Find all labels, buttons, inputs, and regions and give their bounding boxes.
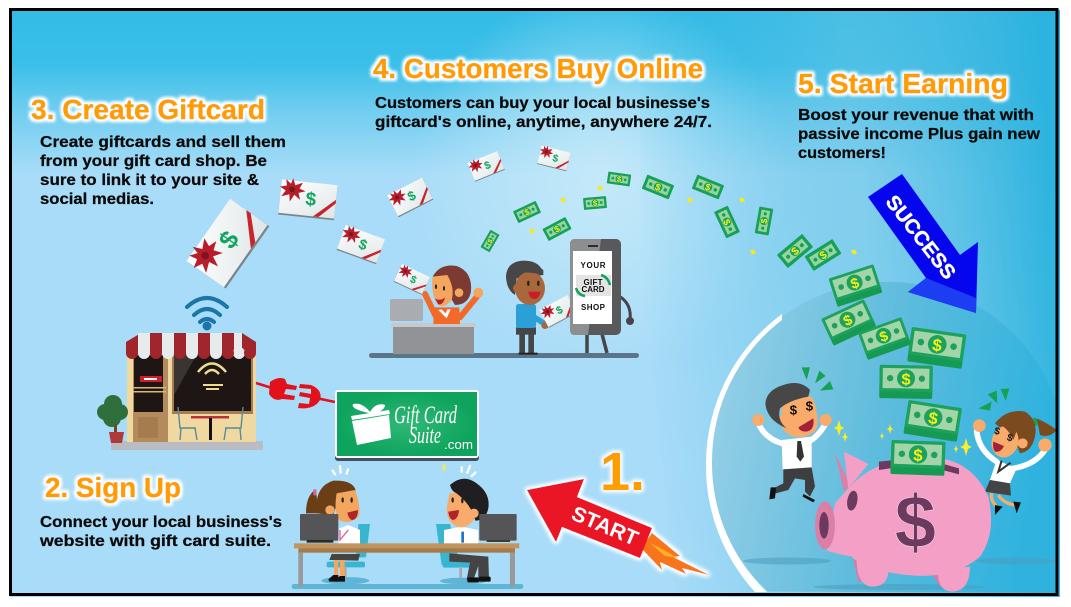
smartphone shop character: SHOP: [581, 303, 606, 312]
piggy bank: [815, 452, 991, 592]
smartphone shop character: CARD: [582, 285, 605, 294]
text: sign up description: [39, 514, 282, 550]
start arrow: START: [568, 502, 642, 551]
text: create giftcard description: from your gift card shop. Be: [40, 153, 267, 170]
text: customers buy description: Customers can buy your local businesse's: [375, 95, 710, 112]
text: create giftcard description: sure to link it to your site &: [40, 172, 259, 189]
happy woman with dollar eyes: [973, 388, 1057, 515]
flying money trail: [480, 171, 857, 271]
office table: [294, 543, 519, 587]
smartphone shop character: GIFT: [584, 278, 603, 287]
text: create giftcard description: [40, 134, 286, 208]
icon: red plug connector: [256, 378, 335, 408]
money bubble: [706, 282, 1057, 593]
office scene: two workers at desk: [292, 465, 523, 589]
text: start earning description: [798, 107, 1041, 162]
text: create giftcard description: social medias.: [40, 191, 154, 208]
customer man: [506, 261, 549, 355]
smartphone shop character: YOUR: [580, 261, 606, 270]
sign: Gift Card Suite .com: .com: [444, 437, 473, 452]
cashier woman: [425, 266, 483, 324]
text: sign up description: website with gift card suite.: [39, 533, 271, 550]
text: sign up description: Connect your local business's: [40, 514, 282, 531]
heading: 2. Sign Up: 2. Sign Up: [45, 472, 181, 503]
sign: Gift Card Suite .com: Gift Card: [394, 402, 457, 429]
customer purchase scene: [369, 239, 639, 358]
icon: wifi signal: [187, 298, 227, 328]
text: start earning description: customers!: [798, 145, 886, 162]
icon: gift box: [351, 404, 391, 445]
text: customers buy description: giftcard's online, anytime, anywhere 24/7.: [375, 114, 712, 131]
happy woman with dollar eyes: $: [993, 426, 1002, 438]
happy man with dollar eyes: [752, 367, 833, 502]
start arrow: [527, 479, 709, 575]
piggy bank: $: [895, 480, 936, 563]
woman at desk: [300, 481, 370, 582]
heading: 5. Start Earning: 5. Start Earning: [798, 68, 1008, 99]
falling cash stacks: [821, 264, 966, 442]
smartphone shop character: [570, 239, 634, 353]
success arrow: SUCCESS: [881, 191, 960, 284]
flying gift cards: [183, 144, 571, 290]
step number 1: 1.: [600, 442, 645, 502]
sign: Gift Card Suite .com: Suite: [409, 423, 441, 449]
heading: 3. Create Giftcard: 3. Create Giftcard: [31, 94, 265, 125]
sign: Gift Card Suite .com: [335, 390, 479, 461]
excitement marks: [333, 465, 475, 476]
text: start earning description: passive income Plus gain new: [798, 126, 1041, 143]
happy woman with dollar eyes: $: [1006, 432, 1014, 445]
cashier desk and monitor: [390, 299, 476, 354]
man at desk: [436, 479, 517, 582]
text: start earning description: Boost your revenue that with: [798, 107, 1034, 124]
heading: 4. Customers Buy Online: 4. Customers Buy Online: [373, 53, 703, 84]
success arrow: [868, 174, 978, 313]
ground shadows: [743, 558, 1056, 590]
text: customers buy description: [375, 95, 712, 131]
happy man with dollar eyes: $: [790, 403, 798, 418]
text: create giftcard description: Create giftcards and sell them: [40, 134, 286, 151]
cash entering piggy slot: [890, 440, 946, 476]
happy man with dollar eyes: $: [806, 399, 814, 414]
storefront: [97, 333, 263, 450]
sparkles: [834, 420, 972, 456]
